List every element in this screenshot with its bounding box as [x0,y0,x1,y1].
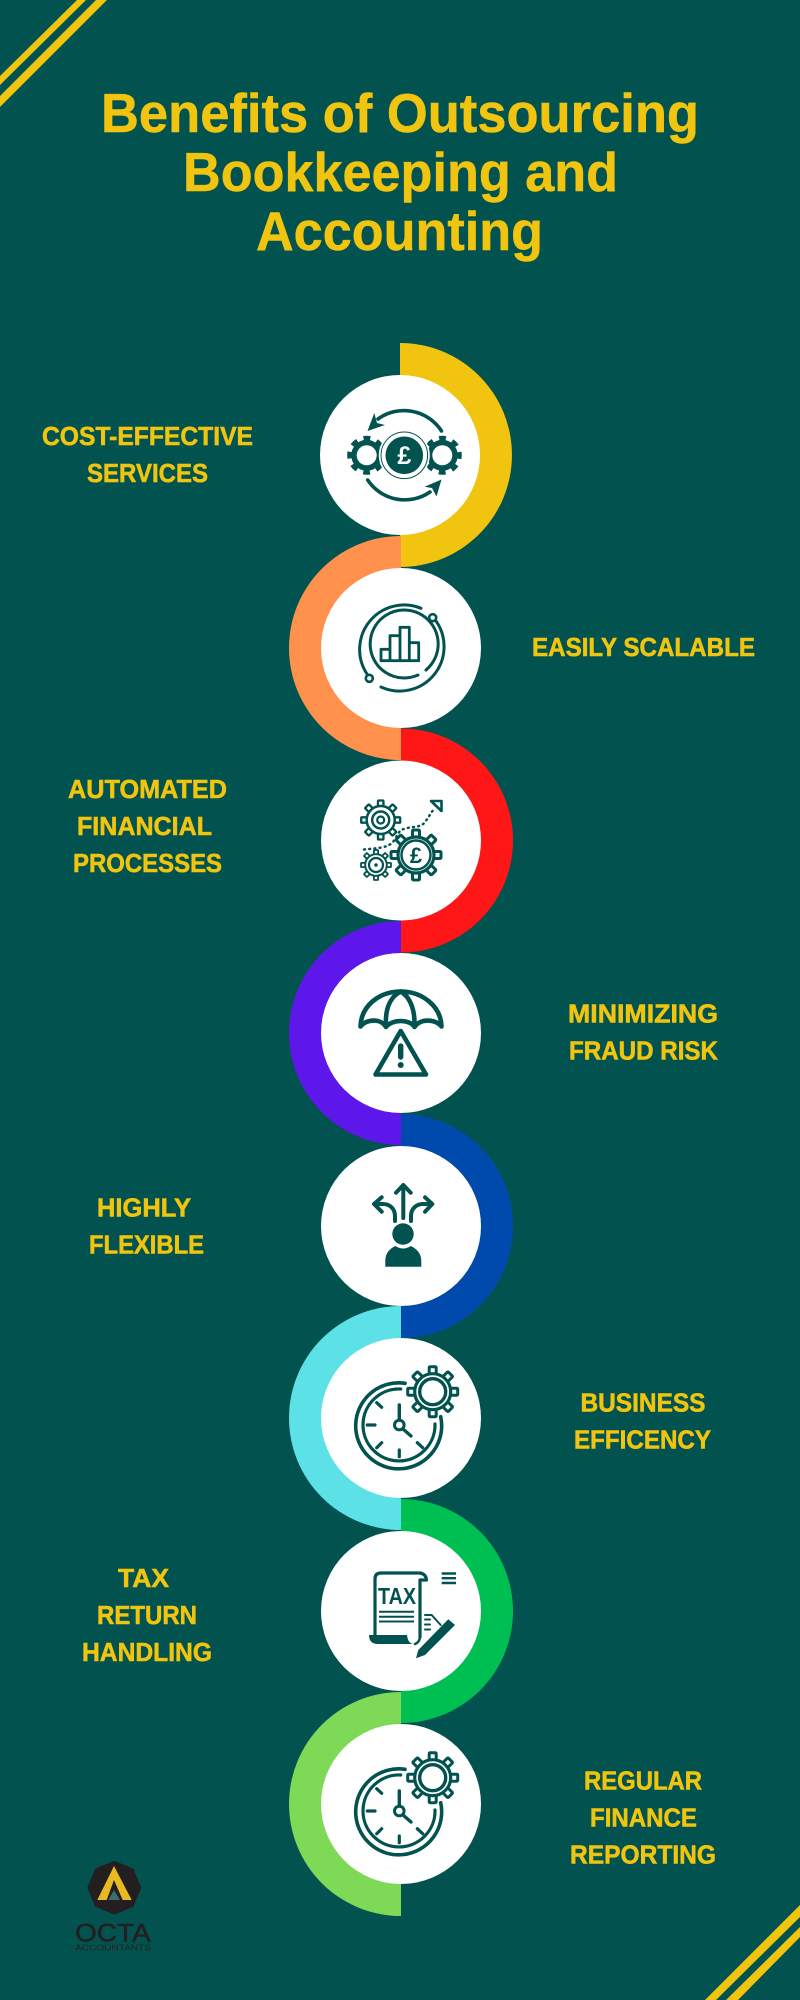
icon: gears and pound coin with cycle arrows: £ [397,442,411,470]
decorative corner stripes: top left [0,0,107,107]
step 7: tax return handling [321,1499,513,1723]
label: cost-effective services: SERVICES [87,460,208,488]
label: minimizing fraud risk [568,1000,719,1066]
logo wordmark: OCTA [75,1920,151,1948]
step 4: minimizing fraud risk [289,921,481,1145]
label: regular finance reporting: REPORTING [570,1842,716,1870]
label: regular finance reporting [570,1768,716,1870]
label: easily scalable: EASILY SCALABLE [532,634,755,662]
step 6: business efficency [289,1306,481,1530]
decorative corner stripes: bottom right [705,1905,800,2000]
label: highly flexible: FLEXIBLE [89,1232,204,1260]
icon: tax document with pen [369,1573,456,1658]
half ring: cyan [289,1306,401,1530]
icon: tax document with pen: TAX [378,1583,417,1609]
white circle [321,1531,481,1691]
label: minimizing fraud risk: MINIMIZING [568,1000,718,1028]
title [101,82,699,262]
half ring: purple [289,921,401,1145]
icon: umbrella over warning triangle [360,992,442,1074]
half ring: light green [289,1692,401,1916]
label: automated financial processes: PROCESSES [73,850,222,878]
step 2: easily scalable [289,536,481,760]
label: regular finance reporting: FINANCE [590,1804,697,1832]
half ring: blue [401,1114,513,1338]
label: cost-effective services: COST-EFFECTIVE [42,423,253,451]
half ring: green [401,1499,513,1723]
label: tax return handling: HANDLING [82,1639,212,1667]
logo: Octa Accountants [75,1861,151,1953]
label: business efficency [574,1390,711,1454]
icon: three gears with dotted arrow [361,800,442,880]
label: minimizing fraud risk: FRAUD RISK [569,1038,719,1066]
title: Benefits of Outsourcing [101,82,699,144]
step 1: cost-effective services [320,343,512,567]
title: Bookkeeping and [183,141,618,203]
white circle [321,953,481,1113]
label: highly flexible: HIGHLY [97,1194,191,1222]
title: Accounting [256,200,543,262]
label: automated financial processes: FINANCIAL [77,813,212,841]
white circle [321,1146,481,1306]
label: tax return handling: TAX [118,1565,169,1593]
step 8: regular finance reporting [289,1692,481,1916]
step 5: highly flexible [321,1114,513,1338]
white circle [321,1724,481,1884]
icon: person with three direction arrows [374,1185,432,1267]
label: business efficency: EFFICENCY [574,1426,711,1454]
icon: clock with gear [356,1367,458,1469]
icon: gears and pound coin with cycle arrows [347,411,462,500]
white circle [321,1338,481,1498]
label: automated financial processes: AUTOMATED [68,776,227,804]
half ring: red [401,728,513,952]
icon: bar chart in rings [360,605,444,691]
icon: three gears with dotted arrow: £ [410,843,423,868]
step 3: automated financial processes [321,728,513,952]
label: business efficency: BUSINESS [580,1390,706,1418]
icon: clock with gear [356,1753,458,1855]
label: highly flexible [89,1194,204,1260]
white circle [321,568,481,728]
label: automated financial processes [68,776,227,878]
label: regular finance reporting: REGULAR [584,1768,702,1796]
logo tagline: ACCOUNTANTS [75,1944,151,1953]
logo mark: octagon with chevron [87,1861,141,1915]
half ring: yellow [400,343,512,567]
half ring: orange [289,536,401,760]
label: tax return handling: RETURN [97,1602,197,1630]
label: tax return handling [82,1565,212,1667]
white circle [321,760,481,920]
label: cost-effective services [42,423,253,488]
white circle [320,375,480,535]
